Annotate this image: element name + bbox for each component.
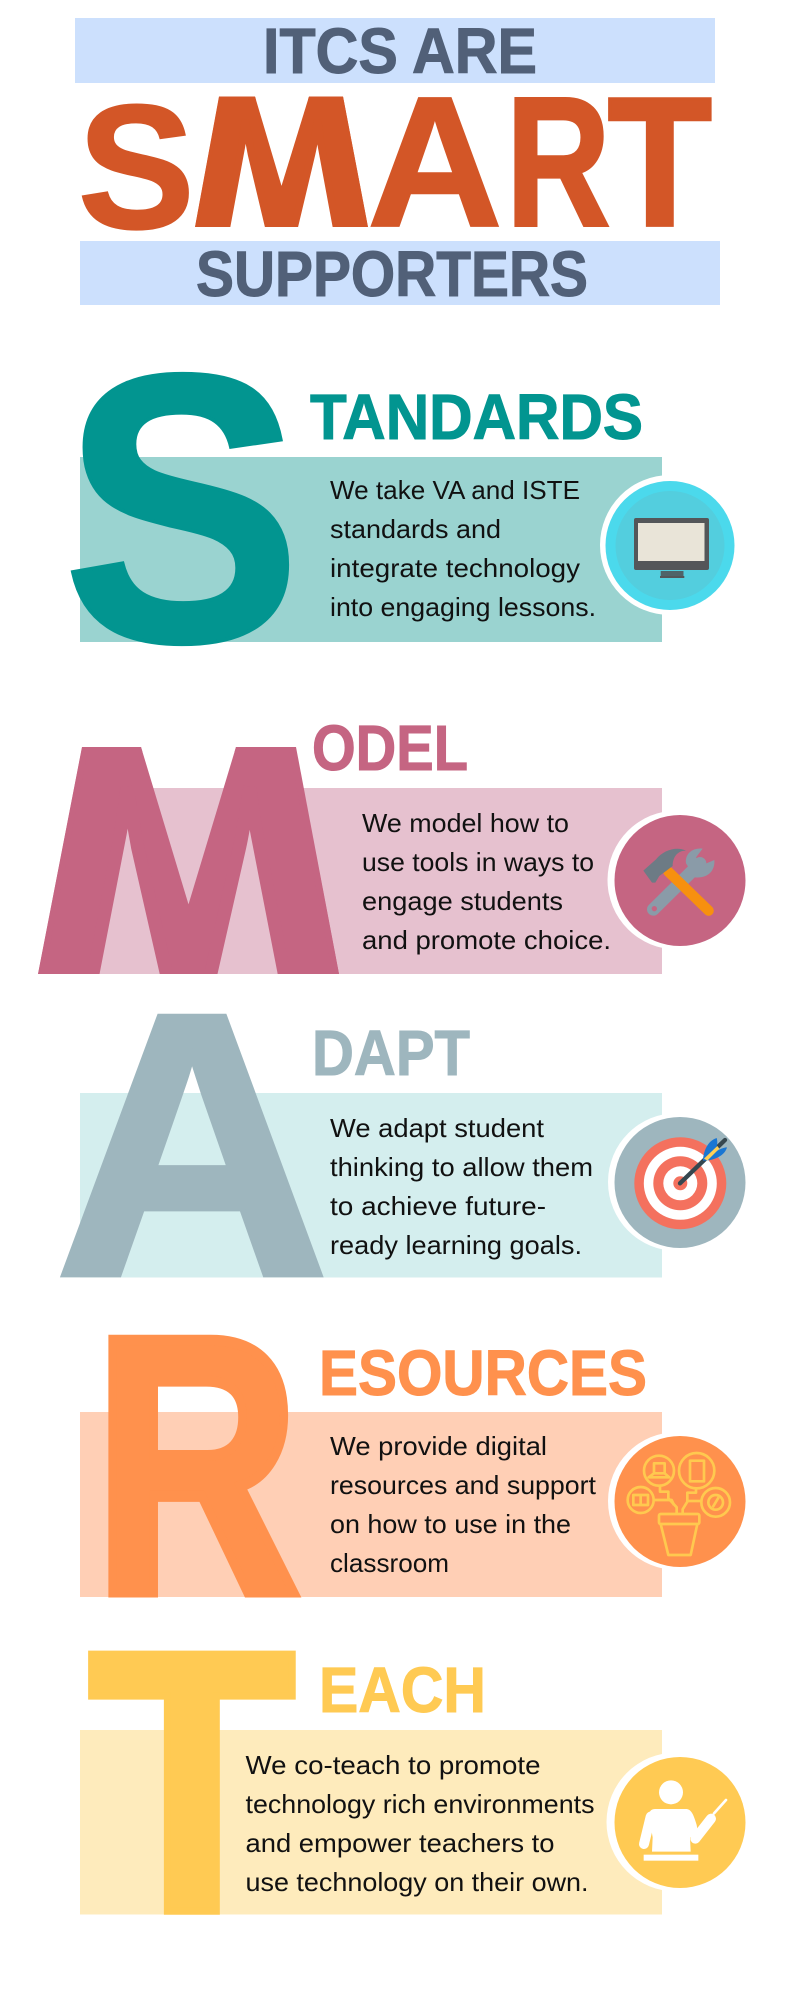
adapt text: ready learning goals. (330, 1230, 582, 1260)
resources text: resources and support (330, 1470, 597, 1500)
standards band (80, 457, 662, 642)
big letter S: S (62, 296, 301, 722)
resources text: on how to use in the (330, 1509, 571, 1539)
standards text: standards and (330, 514, 501, 544)
model text (362, 808, 611, 955)
resources text (330, 1431, 597, 1578)
panel: resources (80, 1261, 746, 1670)
standards text: into engaging lessons. (330, 592, 596, 622)
model text: and promote choice. (362, 925, 611, 955)
big letter M: M (0, 675, 426, 1044)
teach text: We co-teach to promote (246, 1750, 540, 1780)
model text: engage students (362, 886, 563, 916)
title band: ITCS ARE (75, 15, 715, 87)
model band (80, 788, 662, 974)
model text: We model how to (362, 808, 569, 838)
icon: teacher at desk (606, 1752, 746, 1892)
standards text: integrate technology (330, 553, 580, 583)
teach text: technology rich environments (246, 1789, 594, 1819)
big letter T: T (88, 1574, 296, 1990)
standards text: We take VA and ISTE (330, 475, 580, 505)
panel: adapt (54, 936, 746, 1355)
title word: SMART: M (171, 56, 416, 267)
title band: SUPPORTERS (80, 238, 720, 310)
title band: ITCS ARE: ITCS ARE (263, 15, 537, 87)
adapt band (80, 1093, 662, 1278)
panel: standards (62, 296, 740, 722)
title band: SUPPORTERS: SUPPORTERS (196, 238, 588, 310)
adapt text (330, 1113, 593, 1260)
model text: use tools in ways to (362, 847, 594, 877)
title word: SMART: S (78, 68, 195, 266)
icon: computer monitor (600, 475, 740, 615)
teach text: and empower teachers to (246, 1828, 554, 1858)
icon: plant of digital resources (608, 1432, 746, 1570)
panel: model (38, 724, 746, 974)
resources band (80, 1412, 662, 1597)
title word: SMART (82, 96, 712, 231)
teach heading: EACH (319, 1654, 486, 1726)
icon: hammer and wrench (608, 810, 746, 950)
title word: SMART: M (147, 56, 392, 267)
big letter A: A (54, 936, 330, 1355)
standards heading: TANDARDS (310, 381, 643, 453)
resources heading: ESOURCES (319, 1337, 647, 1409)
resources text: We provide digital (330, 1431, 547, 1461)
standards text (330, 475, 596, 622)
teach text (246, 1750, 594, 1897)
big letter R: R (94, 1261, 299, 1670)
icon: target with dart (608, 1113, 746, 1251)
model heading: ODEL (312, 712, 468, 784)
big letter M (38, 747, 339, 974)
adapt text: thinking to allow them (330, 1152, 593, 1182)
adapt text: We adapt student (330, 1113, 545, 1143)
title word: SMART: R (506, 60, 611, 266)
title (75, 15, 720, 310)
teach text: use technology on their own. (246, 1867, 588, 1897)
teach band (80, 1730, 662, 1914)
resources text: classroom (330, 1548, 449, 1578)
adapt text: to achieve future- (330, 1191, 546, 1221)
panel: teach (80, 1574, 746, 1990)
title word: SMART: A (367, 58, 503, 266)
title word: SMART: T (608, 60, 712, 264)
adapt heading: DAPT (312, 1017, 470, 1089)
